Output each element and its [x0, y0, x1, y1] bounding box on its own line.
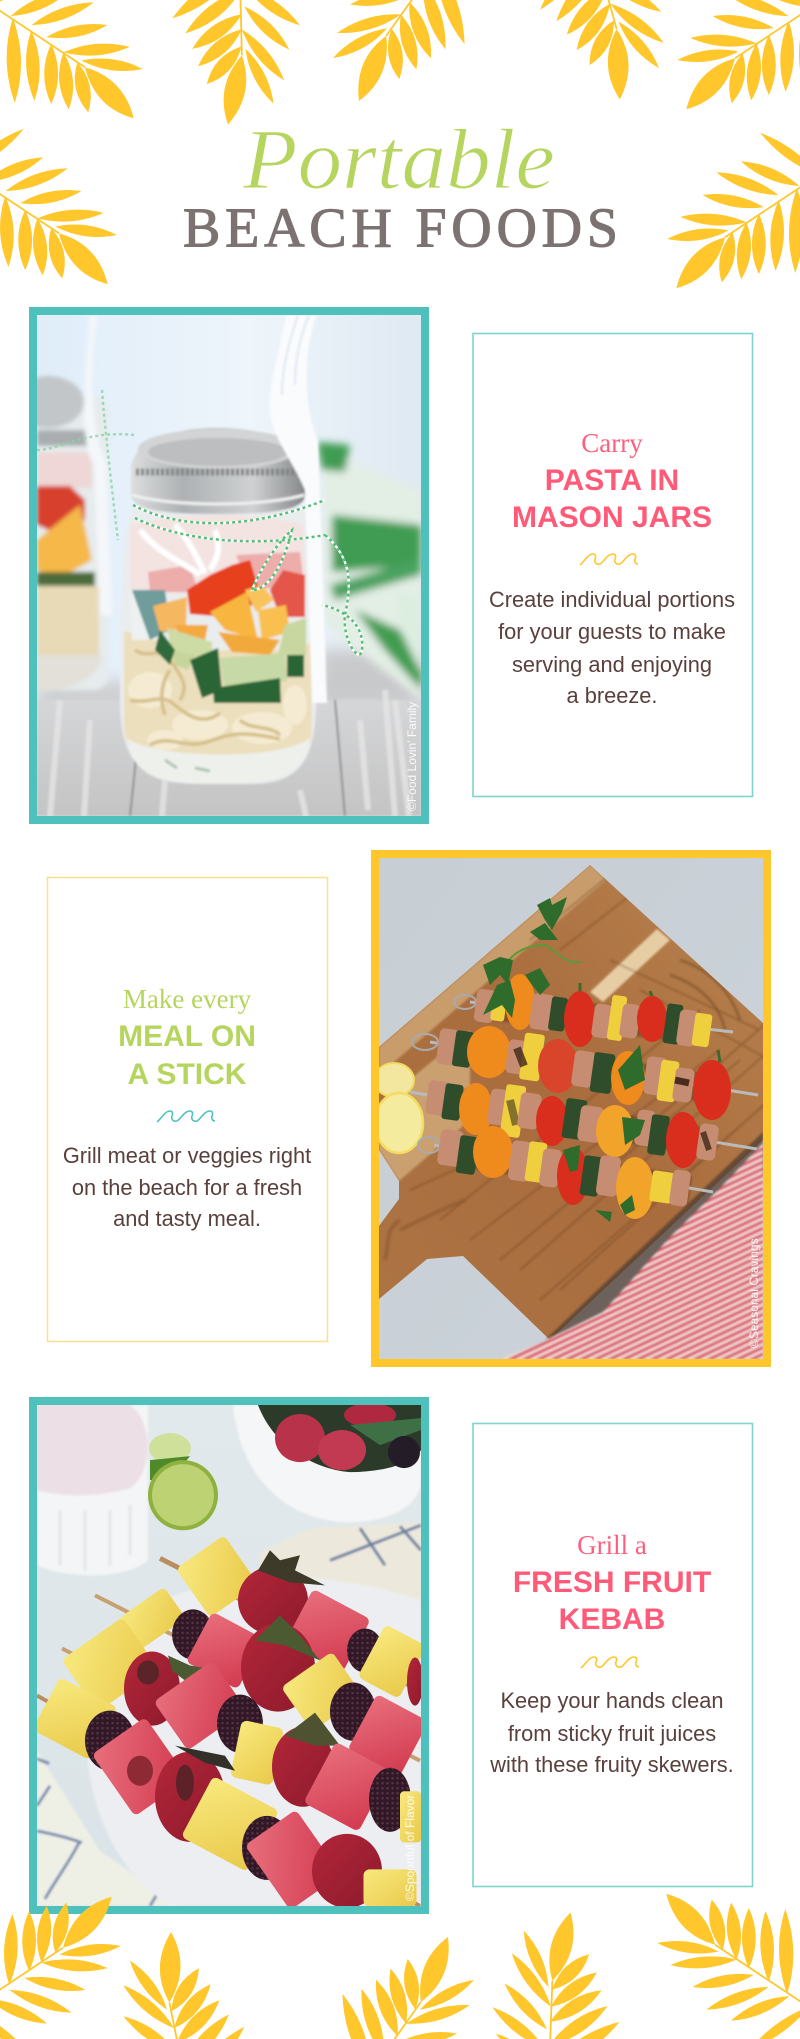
- heading: FRESH FRUIT: [513, 1566, 711, 1599]
- skewer 3: [61, 1617, 421, 1842]
- cutting board: [379, 850, 780, 1340]
- body text: Create individual portions: [489, 587, 735, 612]
- peppers: [187, 560, 262, 617]
- heading: A STICK: [128, 1058, 247, 1091]
- jar lid: [131, 428, 305, 514]
- panel: fresh fruit kebab text: [472, 1422, 754, 1888]
- photo credit: ©Spoonful of Flavor: [403, 1795, 417, 1901]
- skewer 4: [32, 1677, 420, 1910]
- second jar: [12, 315, 112, 692]
- striped cloth: [500, 1143, 763, 1359]
- lead-in: Make every: [123, 984, 252, 1014]
- icon: wave: [157, 1111, 215, 1122]
- skewer shadows: [430, 1005, 720, 1190]
- heading: [118, 1020, 256, 1091]
- icon: palm frond top right: [644, 0, 800, 158]
- cucumbers: [167, 628, 212, 660]
- title: slab line: BEACH FOODS: [183, 198, 618, 260]
- plate: [85, 1577, 421, 1906]
- onion layer: [130, 515, 306, 600]
- icon: palm frond bottom right: [624, 1845, 800, 2039]
- heading: MASON JARS: [512, 501, 712, 534]
- bowl of berries: [233, 1403, 421, 1522]
- shadow under cloth: [545, 1132, 763, 1340]
- icon: palm frond left: [0, 114, 150, 333]
- panel: meal on a stick text: [46, 876, 328, 1342]
- icon: palm frond top 2: [165, 0, 309, 129]
- icon: palm frond top left: [0, 0, 176, 167]
- body text: from sticky fruit juices: [508, 1721, 716, 1746]
- lemons: [374, 1063, 423, 1153]
- icon: wave: [581, 1657, 639, 1668]
- heading: [513, 1566, 711, 1636]
- skewer 1: [160, 1535, 426, 1706]
- photo credit: ©Seasonal Cravings: [747, 1238, 761, 1348]
- table planks: [37, 690, 421, 816]
- skewer 2: [412, 1026, 758, 1120]
- skewer 2: [95, 1587, 429, 1777]
- panel: pasta in mason jars text: [472, 332, 754, 798]
- heading: PASTA IN: [545, 464, 679, 497]
- icon: palm frond bottom 2: [103, 1925, 253, 2039]
- cheese: [153, 597, 187, 632]
- plastic fork: [270, 315, 327, 703]
- skewer 1: [454, 974, 733, 1048]
- body text: for your guests to make: [498, 619, 726, 644]
- skewer 3: [410, 1080, 757, 1168]
- icon: palm frond top 4: [526, 0, 687, 110]
- body text: with these fruity skewers.: [489, 1752, 734, 1777]
- icon: palm frond right: [634, 118, 800, 337]
- limes: [148, 1433, 218, 1530]
- napkins: [37, 1522, 421, 1906]
- main jar glass: [120, 507, 316, 784]
- heading: KEBAB: [559, 1603, 665, 1636]
- body text: and tasty meal.: [113, 1206, 261, 1231]
- lead-in: Carry: [581, 428, 643, 458]
- icon: palm frond bottom 3: [300, 1906, 507, 2039]
- icon: palm frond top 3: [300, 0, 507, 132]
- icon: palm frond bottom 4: [479, 1904, 633, 2039]
- pasta layer: [124, 631, 312, 762]
- photo: vegetable and sausage skewers: [371, 850, 771, 1367]
- dip ramekin: [37, 1405, 148, 1575]
- body text: [489, 1688, 734, 1777]
- baker's twine: [37, 390, 362, 655]
- body text: a breeze.: [567, 683, 657, 708]
- body text: [63, 1143, 311, 1231]
- photo credit: ©Food Lovin' Family: [405, 702, 419, 811]
- skewer 4: [418, 1126, 713, 1219]
- parsley: [483, 897, 645, 1222]
- icon: wave: [580, 554, 638, 565]
- heading: MEAL ON: [118, 1020, 256, 1053]
- photo: fresh fruit kebabs: [29, 1397, 429, 1914]
- lead-in: Grill a: [577, 1530, 647, 1560]
- body text: Grill meat or veggies right: [63, 1143, 311, 1168]
- dressing: [127, 738, 310, 783]
- title: [183, 111, 618, 260]
- body text: serving and enjoying: [512, 652, 712, 677]
- body text: [489, 587, 735, 708]
- icon: palm frond bottom left: [0, 1848, 154, 2039]
- photo: pasta in mason jars: [29, 307, 429, 824]
- heading: [512, 464, 712, 534]
- title: script line: Portable: [242, 111, 555, 207]
- body text: Keep your hands clean: [501, 1688, 723, 1713]
- body text: on the beach for a fresh: [72, 1175, 302, 1200]
- green towel: [317, 442, 421, 700]
